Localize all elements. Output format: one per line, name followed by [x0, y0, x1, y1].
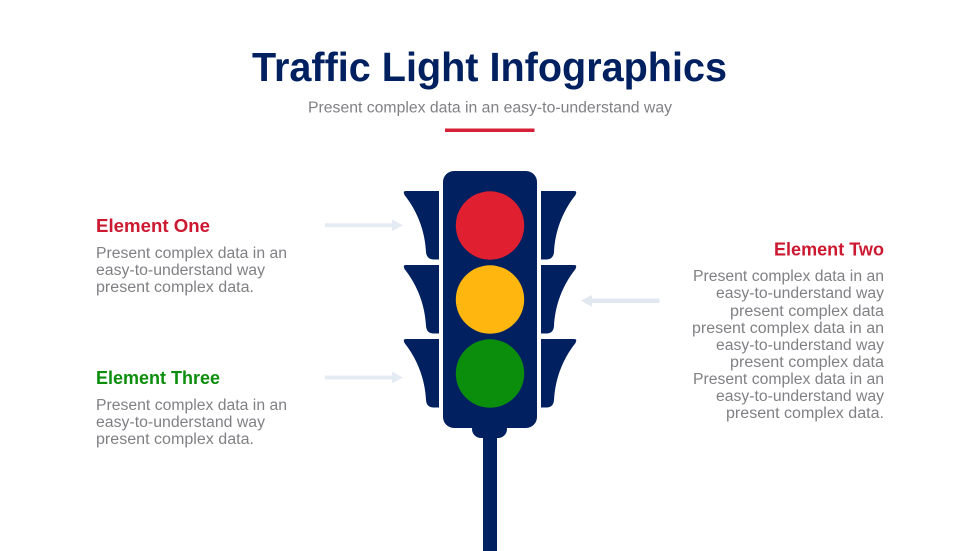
- text block: element one: [96, 215, 287, 296]
- description: element three: Present complex data in an: [96, 397, 287, 414]
- subtitle: Present complex data in an easy-to-understand way: [308, 100, 672, 116]
- description: element three: easy-to-understand way: [96, 414, 265, 431]
- description: element three: [96, 397, 287, 448]
- arrow: element two: [581, 295, 660, 307]
- description: element two: easy-to-understand way: [716, 337, 884, 354]
- left wings: [404, 191, 439, 408]
- text block: element three: [96, 367, 287, 448]
- title: Traffic Light Infographics: [252, 44, 727, 90]
- yellow light: [456, 265, 524, 334]
- pole neck: [472, 420, 507, 438]
- description: element two: Present complex data in an: [693, 371, 884, 388]
- description: element two: present complex data.: [726, 405, 884, 422]
- description: element two: easy-to-understand way: [716, 285, 884, 302]
- description: element two: [692, 268, 884, 422]
- arrow: element three: [325, 372, 403, 384]
- traffic light: [404, 171, 576, 551]
- heading: element two: Element Two: [774, 238, 884, 260]
- description: element two: present complex data: [730, 354, 884, 371]
- arrow: element one: [325, 220, 403, 231]
- description: element one: Present complex data in an: [96, 245, 287, 262]
- description: element two: present complex data: [730, 303, 884, 320]
- heading: element one: Element One: [96, 215, 210, 236]
- right wings: [541, 191, 576, 408]
- description: element two: easy-to-understand way: [716, 388, 884, 405]
- description: element two: Present complex data in an: [693, 268, 884, 285]
- pole: [483, 430, 497, 551]
- description: element two: present complex data in an: [692, 320, 884, 337]
- green light: [456, 339, 524, 408]
- red light: [456, 191, 524, 260]
- description: element one: [96, 245, 287, 296]
- description: element one: easy-to-understand way: [96, 262, 265, 279]
- title underline: [445, 128, 534, 132]
- light housing: [443, 171, 537, 428]
- text block: element two: [692, 238, 884, 422]
- description: element one: present complex data.: [96, 279, 254, 296]
- heading: element three: Element Three: [96, 367, 220, 388]
- description: element three: present complex data.: [96, 431, 254, 448]
